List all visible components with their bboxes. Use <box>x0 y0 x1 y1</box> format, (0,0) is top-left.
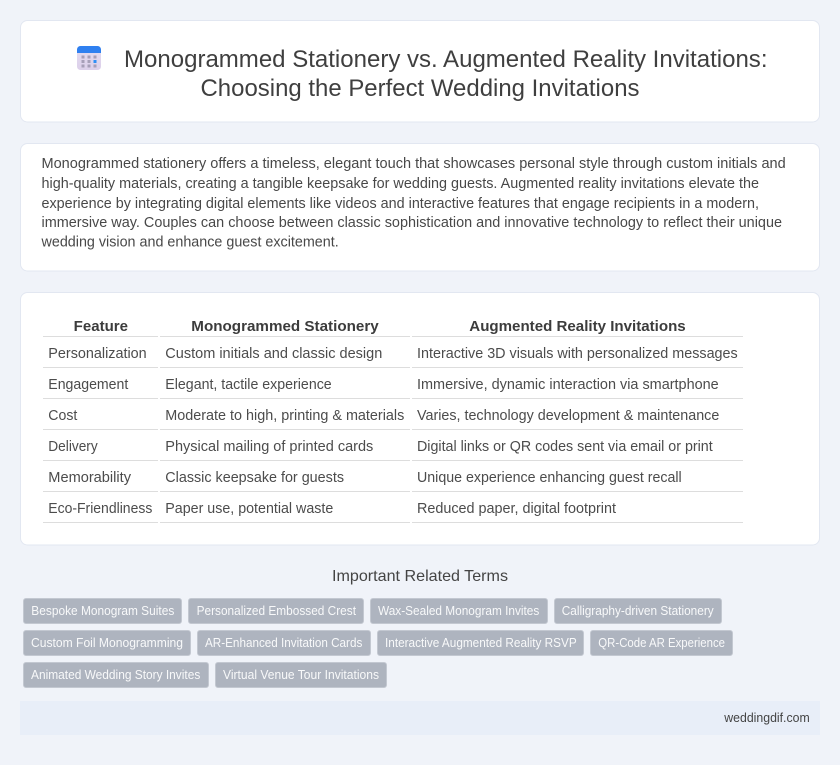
title <box>124 46 768 102</box>
row: personalization: Personalization <box>48 346 147 362</box>
tags: related terms <box>24 598 732 688</box>
tag <box>24 662 208 688</box>
tag <box>554 598 722 624</box>
row: delivery: Digital links or QR codes sent via email or print <box>417 439 713 455</box>
tag <box>24 598 182 624</box>
table header row: Feature <box>74 318 128 335</box>
panel: comparison table <box>20 292 820 545</box>
tag <box>198 630 370 656</box>
tag: Personalized Embossed Crest <box>197 604 356 618</box>
text block: description <box>41 156 786 250</box>
tag <box>370 598 548 624</box>
tag: AR-Enhanced Invitation Cards <box>205 636 362 650</box>
heading: important related terms: Important Related Terms <box>332 568 508 585</box>
tag <box>188 598 364 624</box>
text block: description: immersive way. Couples can choose between classic sophistication and innovative technology to reflect their unique <box>42 215 782 231</box>
table header row <box>74 318 686 335</box>
row: cost: Varies, technology development & maintenance <box>417 408 719 424</box>
title: Choosing the Perfect Wedding Invitations <box>200 75 640 102</box>
tag <box>24 630 190 656</box>
text block: description: Monogrammed stationery offers a timeless, elegant touch that showcases personal style through custom initials and <box>42 156 786 172</box>
tag: Animated Wedding Story Invites <box>31 668 200 682</box>
tag: Virtual Venue Tour Invitations <box>223 668 379 682</box>
text block: description: wedding vision and enhance guest excitement. <box>41 234 339 250</box>
text block: description: experience by integrating digital elements like videos and interactive features that engage recipients in a modern, <box>42 196 759 212</box>
table header row: Monogrammed Stationery <box>191 318 379 335</box>
tag: Interactive Augmented Reality RSVP <box>385 636 577 650</box>
row: delivery: Delivery <box>48 439 98 455</box>
panel: header <box>20 20 820 122</box>
tag: Wax-Sealed Monogram Invites <box>378 604 539 618</box>
icon: calendar <box>77 46 101 70</box>
footer bar: weddingdif.com <box>723 710 810 725</box>
tag: Calligraphy-driven Stationery <box>562 604 714 618</box>
footer bar <box>20 701 820 735</box>
tag: Custom Foil Monogramming <box>31 636 183 650</box>
row: personalization: Interactive 3D visuals with personalized messages <box>417 346 738 362</box>
row: eco-friendliness: Reduced paper, digital footprint <box>417 501 616 517</box>
row: cost: Moderate to high, printing & materials <box>165 408 404 424</box>
text block: description: high-quality materials, creating a tangible keepsake for wedding guests. Augmented reality invitations elevate the <box>42 176 759 192</box>
row: memorability <box>48 470 682 486</box>
row: engagement: Immersive, dynamic interaction via smartphone <box>417 377 719 393</box>
row: personalization: Custom initials and classic design <box>165 346 382 362</box>
tag <box>590 630 732 656</box>
row: personalization <box>48 346 738 362</box>
row: memorability: Classic keepsake for guests <box>165 470 344 486</box>
row: eco-friendliness <box>48 501 616 517</box>
row: delivery: Physical mailing of printed cards <box>165 439 373 455</box>
row: eco-friendliness: Eco-Friendliness <box>48 501 152 517</box>
row: eco-friendliness: Paper use, potential waste <box>165 501 333 517</box>
panel: description <box>20 144 820 271</box>
tag <box>216 662 386 688</box>
row: memorability: Memorability <box>48 470 132 486</box>
tag <box>378 630 584 656</box>
row: memorability: Unique experience enhancing guest recall <box>417 470 682 486</box>
tag: QR-Code AR Experience <box>598 636 725 650</box>
row: cost <box>48 408 719 424</box>
row: engagement: Elegant, tactile experience <box>165 377 332 393</box>
title: Monogrammed Stationery vs. Augmented Reality Invitations: <box>124 46 768 73</box>
tag: Bespoke Monogram Suites <box>31 604 174 618</box>
table header row: Augmented Reality Invitations <box>469 318 686 335</box>
row: engagement <box>48 377 719 393</box>
row: cost: Cost <box>48 408 77 424</box>
row: delivery <box>48 439 713 455</box>
row: engagement: Engagement <box>48 377 128 393</box>
